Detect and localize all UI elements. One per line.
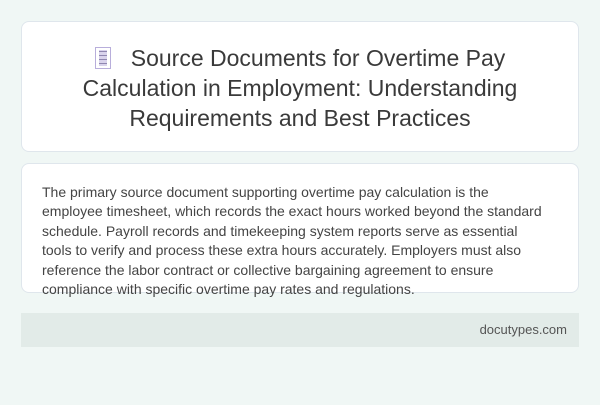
- text block: reference the labor contract or collective bargaining agreement to ensure: [42, 262, 493, 278]
- text block: compliance with specific overtime pay rates and regulations.: [42, 281, 415, 297]
- footer text: docutypes.com: [480, 322, 567, 337]
- footer bar: [21, 313, 579, 347]
- text block: The primary source document supporting overtime pay calculation is the: [42, 184, 489, 200]
- text block: employee timesheet, which records the exact hours worked beyond the standard: [42, 203, 542, 219]
- text block: [42, 184, 542, 297]
- panel: description: [21, 163, 579, 293]
- text block: tools to verify and process these extra hours accurately. Employers must also: [42, 242, 521, 258]
- icon: document: [95, 47, 111, 69]
- text block: schedule. Payroll records and timekeeping system reports serve as essential: [42, 223, 517, 239]
- panel: title card: [21, 21, 579, 152]
- title: Source Documents for Overtime Pay Calculation in Employment: Understanding Requirements and Best Practices: [83, 45, 517, 131]
